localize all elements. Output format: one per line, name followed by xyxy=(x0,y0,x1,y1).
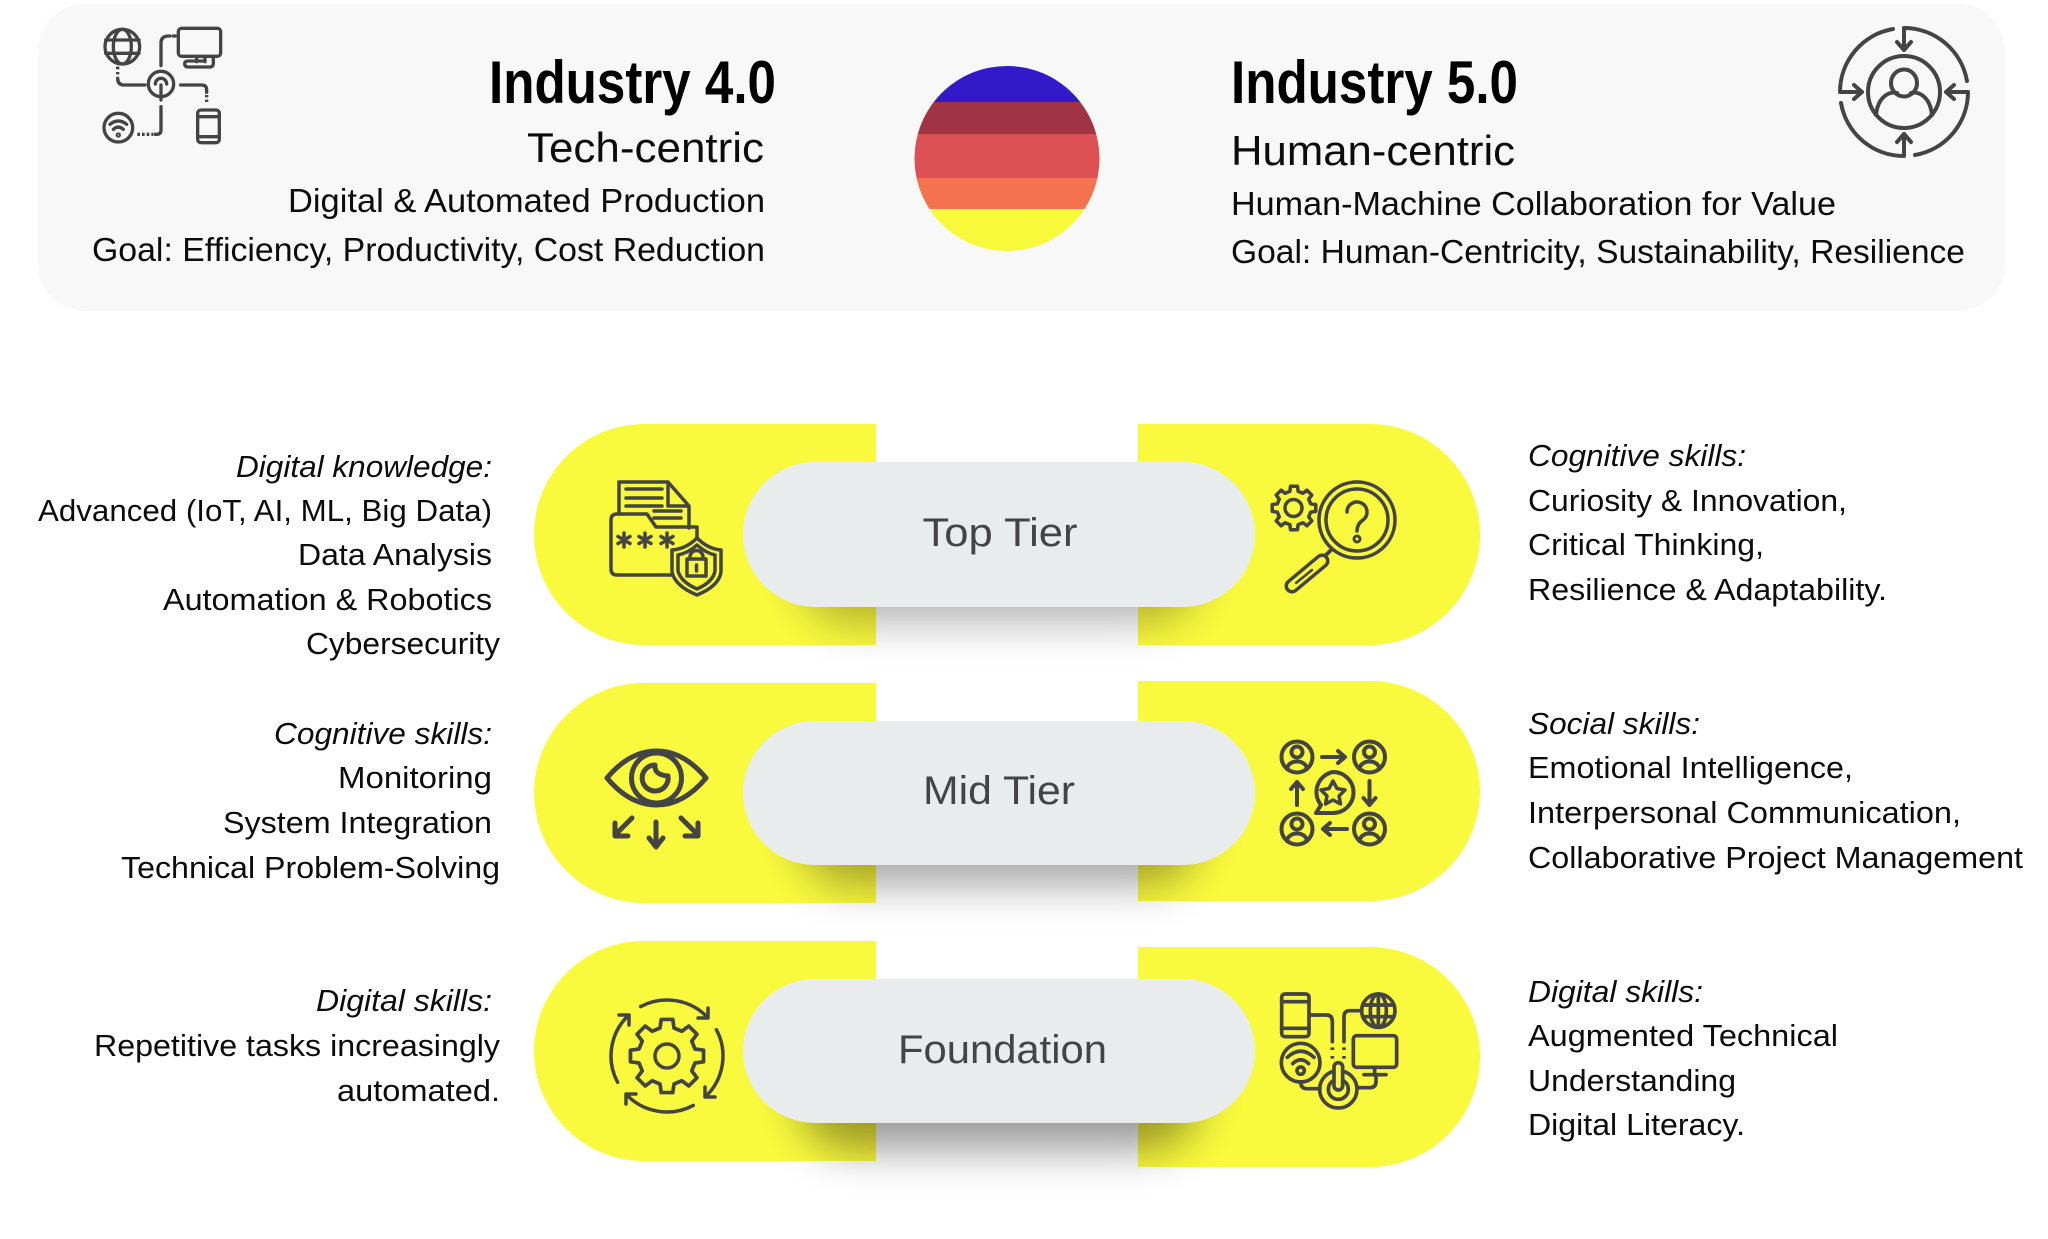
grey pill xyxy=(743,462,1255,607)
text block: mid tier right: Social skills: xyxy=(1528,706,1700,741)
left yellow tab xyxy=(534,683,876,903)
text block: top tier right: Curiosity & Innovation, xyxy=(1528,483,1847,518)
text block: foundation right: Understanding xyxy=(1528,1063,1736,1098)
text block: foundation right: Digital skills: xyxy=(1528,974,1703,1009)
text block: foundation left: automated. xyxy=(337,1073,500,1108)
pill shadow xyxy=(800,771,1198,885)
text block: foundation left: Repetitive tasks increasingly xyxy=(94,1028,501,1063)
text block: foundation left xyxy=(94,983,501,1108)
panel: header comparison xyxy=(94,26,1970,270)
text block: top tier right: Cognitive skills: xyxy=(1528,438,1746,473)
striped circle xyxy=(910,60,1105,255)
text block: foundation right xyxy=(1528,974,1838,1142)
right yellow tab xyxy=(1138,947,1480,1167)
icon: people exchange with star bubble xyxy=(1282,742,1385,844)
grey pill xyxy=(743,721,1255,865)
label: Mid Tier: Mid Tier xyxy=(923,769,1075,813)
icon: person in circle with arrows xyxy=(1840,28,1968,156)
pill shadow xyxy=(800,1029,1198,1149)
right yellow tab xyxy=(1138,424,1480,645)
tier: foundation xyxy=(534,941,1480,1167)
text block: top tier right: Resilience & Adaptability. xyxy=(1528,572,1887,607)
text block: mid tier left: Technical Problem-Solving xyxy=(121,850,500,885)
text block: mid tier right xyxy=(1528,706,2023,875)
text block: mid tier right: Interpersonal Communication, xyxy=(1528,795,1961,830)
title: Industry 4.0: Industry 4.0 xyxy=(489,49,776,116)
icon: document folder and shield xyxy=(611,482,721,595)
text: Industry 4.0 goal: Goal: Efficiency, Productivity, Cost Reduction xyxy=(92,231,765,268)
left yellow tab xyxy=(534,941,876,1161)
tier: mid xyxy=(534,681,1480,903)
text block: mid tier right: Emotional Intelligence, xyxy=(1528,750,1853,785)
left yellow tab xyxy=(534,424,876,645)
right yellow tab xyxy=(1138,681,1480,901)
grey pill xyxy=(743,979,1255,1123)
icon: connected devices xyxy=(104,28,221,143)
text block: foundation left: Digital skills: xyxy=(316,983,492,1018)
pill shadow xyxy=(800,512,1198,622)
label: Foundation: Foundation xyxy=(898,1028,1107,1072)
text block: top tier left: Cybersecurity xyxy=(306,626,501,661)
icon: gear and magnifier xyxy=(1272,482,1395,586)
text block: top tier left: Advanced (IoT, AI, ML, Big Data) xyxy=(38,493,492,528)
label: Top Tier: Top Tier xyxy=(922,511,1078,555)
text block: foundation right: Digital Literacy. xyxy=(1528,1107,1745,1142)
text block: foundation right: Augmented Technical xyxy=(1528,1018,1838,1053)
text block: top tier right xyxy=(1528,438,1887,607)
text block: mid tier left: Monitoring xyxy=(338,760,492,795)
text block: top tier left xyxy=(38,449,501,661)
tier: top xyxy=(534,424,1480,645)
text: production description: Digital & Automated Production xyxy=(288,182,765,219)
subtitle: Tech-centric: Tech-centric xyxy=(527,124,764,171)
title: Industry 5.0: Industry 5.0 xyxy=(1231,49,1518,116)
icon: eye with arrows xyxy=(607,751,706,847)
text block: top tier left: Data Analysis xyxy=(298,537,492,572)
text: Industry 5.0 goal: Goal: Human-Centricity, Sustainability, Resilience xyxy=(1231,233,1965,270)
subtitle: Human-centric: Human-centric xyxy=(1231,127,1515,174)
text block: mid tier left xyxy=(121,716,500,885)
icon: gear with cycle arrows xyxy=(611,1000,723,1112)
text: collaboration description: Human-Machine Collaboration for Value xyxy=(1231,185,1836,222)
text block: mid tier left: Cognitive skills: xyxy=(274,716,492,751)
text block: mid tier right: Collaborative Project Management xyxy=(1528,840,2023,875)
text block: top tier left: Digital knowledge: xyxy=(236,449,492,484)
icon: connected devices with power button xyxy=(1281,994,1397,1108)
text block: top tier left: Automation & Robotics xyxy=(163,582,492,617)
text block: mid tier left: System Integration xyxy=(223,805,492,840)
text block: top tier right: Critical Thinking, xyxy=(1528,527,1764,562)
